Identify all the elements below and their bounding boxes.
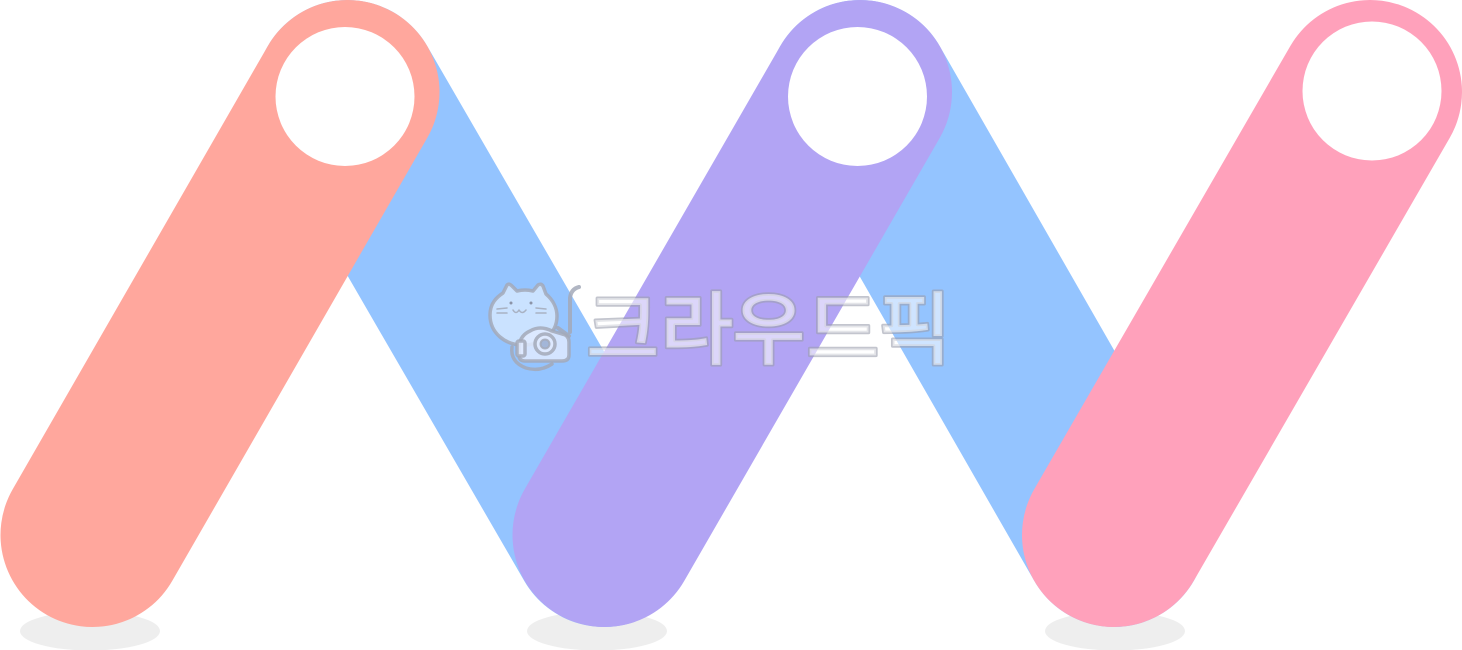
blue connector band 1: [348, 92, 604, 535]
watermark text: 픽: [878, 266, 952, 382]
ground shadow 2: [527, 612, 667, 650]
ground shadow 1: [20, 612, 160, 650]
pink capsule hole: [1302, 22, 1442, 160]
purple capsule hole: [788, 27, 927, 166]
pink capsule: [1114, 22, 1442, 535]
watermark text: 라: [660, 266, 734, 382]
salmon capsule: [92, 27, 414, 535]
purple capsule: [604, 27, 927, 535]
watermark text: 드: [806, 266, 880, 382]
watermark: [490, 266, 952, 382]
watermark text: 크: [586, 266, 660, 382]
salmon capsule hole: [276, 27, 414, 166]
icon: cat with camera: [490, 284, 579, 369]
blue connector band 2: [860, 92, 1114, 535]
watermark text: 우: [732, 266, 806, 382]
ground shadow 3: [1045, 612, 1185, 650]
